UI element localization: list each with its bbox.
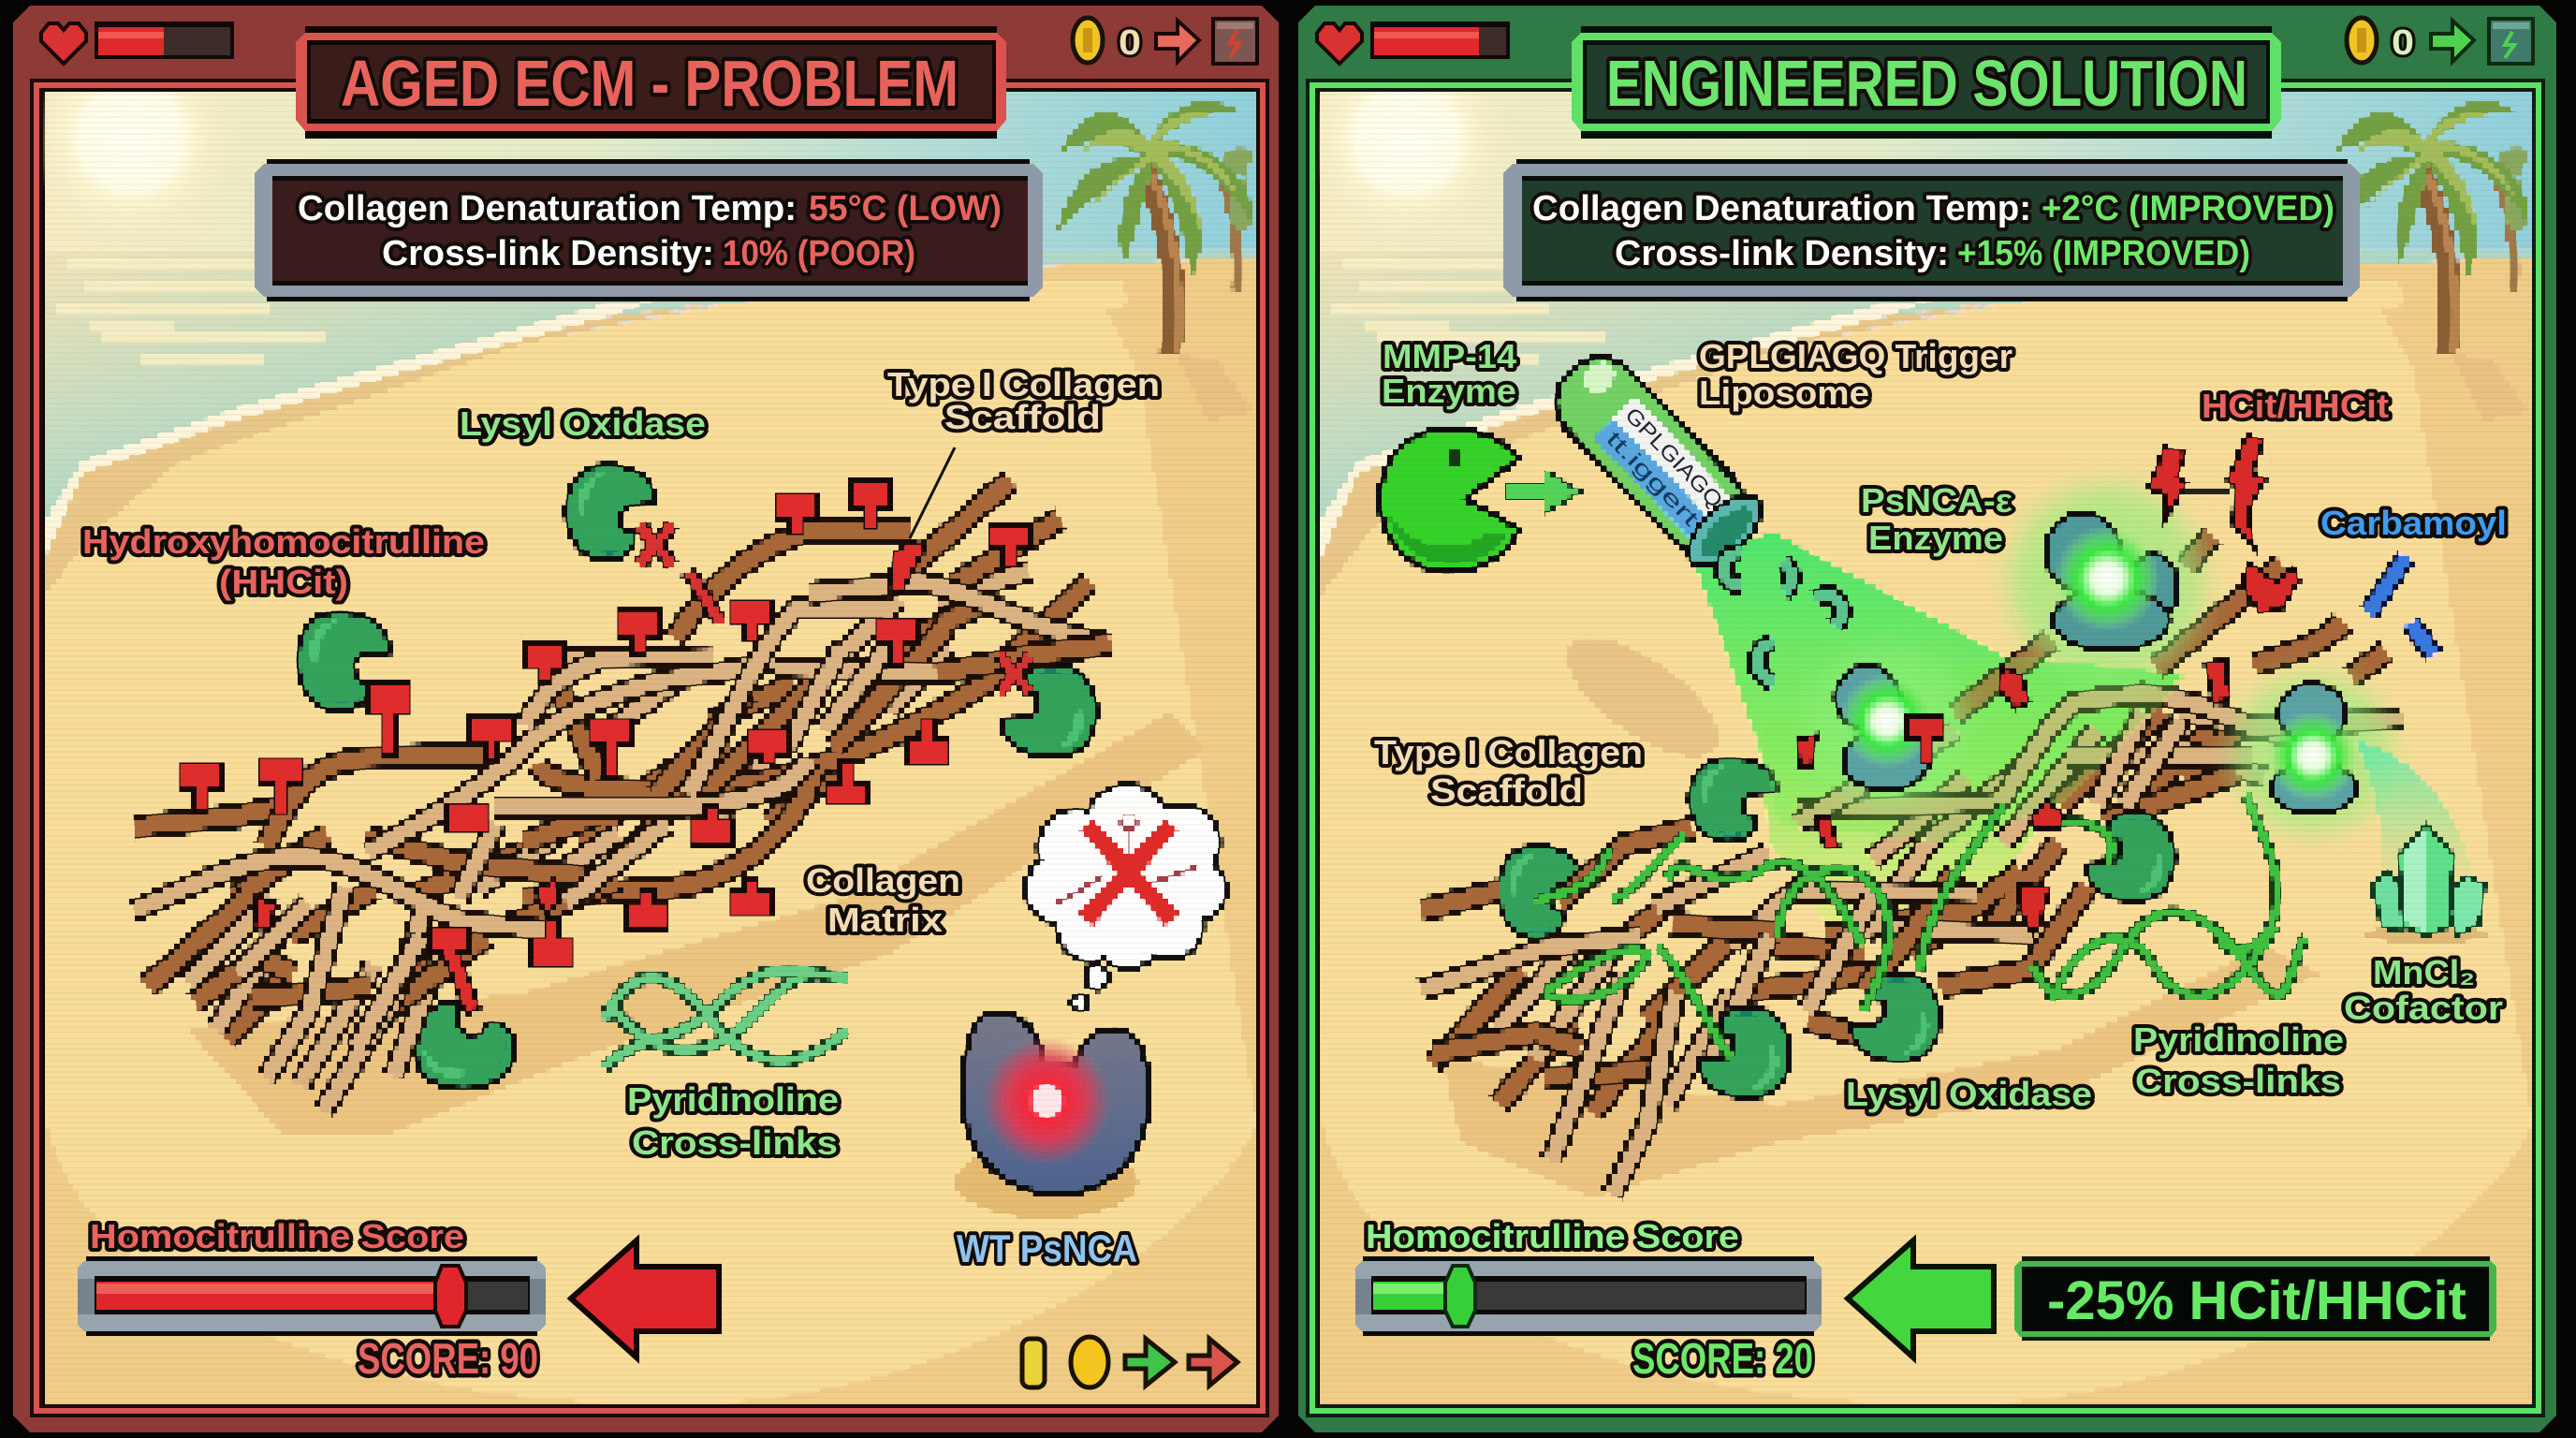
HCit/HHCit red fragments xyxy=(1797,435,2299,936)
label: GPLGIAGQ trigger liposome: GPLGIAGQ Trigger xyxy=(1699,337,2012,375)
thought bubble with red X xyxy=(1022,782,1229,1014)
enzyme: lysyl oxidase left xyxy=(1499,846,1583,939)
icon: MMP-14 pacman enzyme xyxy=(1380,429,1519,572)
icon: carbamoyl blue pieces xyxy=(2368,557,2434,655)
arrow: green to liposome xyxy=(1506,470,1581,514)
green tint over upper fibres xyxy=(1760,655,2190,843)
icon: broken box xyxy=(1213,19,1257,64)
enzyme: lysyl oxidase right xyxy=(2086,812,2174,901)
leader line for scaffold xyxy=(910,448,955,538)
label: pyridinoline cross-links: Cross-links xyxy=(2135,1062,2341,1100)
sand shadow below collagen xyxy=(1442,946,2321,1198)
stats panel: denaturation and cross-link density: Cross-link Density: xyxy=(382,234,714,273)
liposome printed labels xyxy=(1599,403,1728,534)
enzyme: lysyl oxidase left xyxy=(298,612,389,712)
label: PsNCA-e enzyme: Enzyme xyxy=(1868,519,2003,557)
label: PsNCA-e enzyme: PsNCA-ε xyxy=(1861,481,2012,520)
label: GPLGIAGQ trigger liposome xyxy=(1699,337,2012,412)
label: GPLGIAGQ trigger liposome: Liposome xyxy=(1699,374,1869,412)
label: PsNCA-e enzyme xyxy=(1861,481,2012,557)
teal glow towards cofactor xyxy=(2354,740,2476,899)
arrow: red pointing left xyxy=(571,1240,719,1357)
label: pyridinoline cross-links xyxy=(627,1080,839,1162)
label: collagen matrix: Collagen xyxy=(806,861,960,900)
score value: SCORE: 20 xyxy=(1632,1334,1813,1383)
arrow: green pointing left xyxy=(1848,1240,1994,1357)
stats panel: denaturation and cross-link density xyxy=(255,159,1043,301)
label: homocitrulline score: Homocitrulline Score xyxy=(90,1217,464,1255)
background: beach with sea, sun and palm xyxy=(1304,36,2536,1406)
label: hydroxyhomocitrulline: (HHCit) xyxy=(219,563,348,601)
sand shadow blotch xyxy=(1548,616,1737,779)
label: type I collagen scaffold: Type I Collagen xyxy=(1374,733,1643,771)
HHCit red markers on fibres xyxy=(180,480,1031,1015)
icon: green arrow xyxy=(2431,21,2474,62)
icon: PsNCA-e enzyme upper xyxy=(2009,484,2205,681)
label: pyridinoline cross-links: Cross-links xyxy=(632,1123,838,1162)
panel frame: red border xyxy=(13,6,1279,1432)
panel frame: green border xyxy=(1298,6,2556,1432)
icon: heart life xyxy=(1317,23,1362,64)
glow beam from liposome xyxy=(1690,534,2181,936)
liposome printed labels: tt.iggert xyxy=(1602,426,1705,531)
score value: SCORE: 90 xyxy=(358,1334,538,1383)
icon: PsNCA-e enzyme middle xyxy=(1808,646,1967,805)
score bar: 90 xyxy=(78,1256,546,1336)
label: collagen matrix xyxy=(806,861,960,939)
label: carbamoyl: Carbamoyl xyxy=(2320,504,2507,542)
icons: coins and arrows bottom right xyxy=(1022,1337,1237,1387)
WT PsNCA shadow xyxy=(955,1144,1138,1219)
label: MnCl2 cofactor: Cofactor xyxy=(2344,989,2503,1027)
label: lysyl oxidase: Lysyl Oxidase xyxy=(460,404,706,443)
panel: engineered solution xyxy=(1298,6,2556,1432)
label: MnCl2 cofactor xyxy=(2344,953,2503,1027)
stats panel: improved denaturation and cross-link density: +2°C (IMPROVED) xyxy=(2042,189,2334,228)
label: hydroxyhomocitrulline xyxy=(82,522,485,601)
label: pyridinoline cross-links: Pyridinoline xyxy=(627,1080,839,1119)
callout: -25% HCit/HHCit: -25% HCit/HHCit xyxy=(2047,1270,2466,1331)
enzyme: lysyl oxidase right xyxy=(1002,664,1096,756)
label: type I collagen scaffold: Scaffold xyxy=(1430,771,1583,810)
stats panel: denaturation and cross-link density: 10% (POOR) xyxy=(723,234,915,273)
liposome printed labels: GPLGIAGQ xyxy=(1620,403,1728,512)
label: lysyl oxidase: Lysyl Oxidase xyxy=(1846,1075,2092,1113)
icon: PsNCA-e enzyme right xyxy=(2233,674,2393,833)
beach scene and problem artwork xyxy=(28,36,1260,1406)
icon: heart life xyxy=(41,23,86,64)
label: MMP-14 enzyme xyxy=(1382,337,1516,410)
icon: coin xyxy=(2347,18,2377,63)
background: beach with sea, sun and palm xyxy=(28,36,1260,1406)
label: type I collagen scaffold xyxy=(887,365,1160,436)
chart: collagen fibre matrix xyxy=(133,480,1110,1111)
stats panel: improved denaturation and cross-link density xyxy=(1503,159,2360,301)
icon: GPLGIAGQ trigger liposome xyxy=(1538,341,1773,579)
enzyme: lysyl oxidase bottom xyxy=(416,1002,515,1089)
red X marks near enzymes xyxy=(638,524,1030,693)
small released enzymes in beam xyxy=(1723,552,1841,683)
sand shadow below collagen xyxy=(187,712,1208,1133)
title: aged ECM - problem xyxy=(296,26,1006,139)
title: engineered solution xyxy=(1572,26,2281,139)
stats panel: denaturation and cross-link density: Collagen Denaturation Temp: xyxy=(298,189,797,228)
callout: -25% HCit/HHCit xyxy=(2014,1256,2496,1341)
green pyridinoline cross-links woven through fibres xyxy=(1535,794,2305,1058)
beach scene and solution artwork xyxy=(1304,36,2536,1406)
icon: red arrow xyxy=(1156,21,1199,62)
label: WT PsNCA: WT PsNCA xyxy=(957,1226,1137,1270)
enzyme: lysyl oxidase bottom xyxy=(1699,1006,1790,1097)
label: HCit/HHCit: HCit/HHCit xyxy=(2202,387,2389,425)
label: type I collagen scaffold: Scaffold xyxy=(944,398,1101,436)
health bar xyxy=(95,22,234,59)
chart: engineered collagen fibre matrix xyxy=(1421,535,2402,1196)
enzyme: lysyl oxidase upper xyxy=(1690,758,1777,842)
icon: WT PsNCA enzyme xyxy=(963,1013,1149,1195)
stats panel: improved denaturation and cross-link density: +15% (IMPROVED) xyxy=(1957,234,2250,273)
label: MnCl2 cofactor: MnCl₂ xyxy=(2373,953,2475,991)
coin count: 0 xyxy=(2392,23,2414,63)
label: pyridinoline cross-links: Pyridinoline xyxy=(2133,1020,2344,1059)
score bar: 20 xyxy=(1355,1256,1822,1336)
icon: box xyxy=(2489,19,2533,64)
title: aged ECM - problem: AGED ECM - PROBLEM xyxy=(341,47,959,120)
panel: aged ECM problem xyxy=(13,6,1279,1432)
enzyme: lysyl oxidase lower xyxy=(1852,973,1939,1062)
coin count: 0 xyxy=(1119,23,1141,63)
stats panel: denaturation and cross-link density: 55°C (LOW) xyxy=(809,189,1002,228)
label: type I collagen scaffold xyxy=(1374,733,1643,810)
label: collagen matrix: Matrix xyxy=(827,901,943,939)
label: MMP-14 enzyme: MMP-14 xyxy=(1383,337,1516,375)
icon: coin xyxy=(1073,18,1103,63)
stats panel: improved denaturation and cross-link density: Collagen Denaturation Temp: xyxy=(1532,189,2031,228)
label: hydroxyhomocitrulline: Hydroxyhomocitrulline xyxy=(82,522,485,561)
title: engineered solution: ENGINEERED SOLUTION xyxy=(1606,47,2247,120)
pyridinoline cross-link strands xyxy=(604,971,847,1067)
label: homocitrulline score: Homocitrulline Score xyxy=(1366,1217,1739,1255)
label: MMP-14 enzyme: Enzyme xyxy=(1382,372,1516,410)
icon: MnCl2 crystal cluster xyxy=(2364,823,2488,944)
health bar xyxy=(1370,22,1510,59)
enzyme: lysyl oxidase top xyxy=(566,465,655,561)
label: pyridinoline cross-links xyxy=(2133,1020,2344,1100)
label: type I collagen scaffold: Type I Collagen xyxy=(887,365,1160,404)
stats panel: improved denaturation and cross-link density: Cross-link Density: xyxy=(1615,234,1949,273)
